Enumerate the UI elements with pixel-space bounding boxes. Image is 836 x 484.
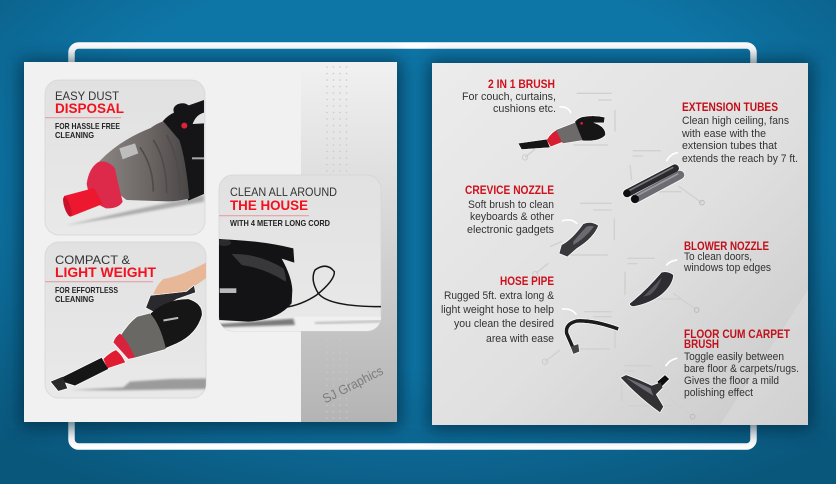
item: 2 in 1 brush: cushions etc. <box>493 103 556 115</box>
item: extension tubes: Clean high ceiling, fans <box>682 115 789 127</box>
card: compact and light weight: LIGHT WEIGHT <box>55 265 157 280</box>
item: crevice nozzle <box>465 185 614 277</box>
item: hose pipe: you clean the desired <box>454 318 554 330</box>
item: floor cum carpet brush: Toggle easily between <box>684 351 784 363</box>
icon: hose <box>542 273 625 364</box>
item: crevice nozzle: electronic gadgets <box>467 224 554 236</box>
item: floor cum carpet brush: polishing effect <box>684 387 753 399</box>
card: easy dust disposal <box>45 80 205 235</box>
item: floor cum carpet brush <box>621 329 799 419</box>
item: extension tubes: extension tubes that <box>682 140 777 152</box>
subtext: WITH 4 METER LONG CORD <box>230 218 330 228</box>
panel shadows <box>20 60 813 430</box>
item: hose pipe: area with ease <box>486 333 554 345</box>
subtext <box>55 285 118 304</box>
vacuum with power cord <box>218 239 381 331</box>
item: crevice nozzle: CREVICE NOZZLE <box>465 185 554 197</box>
heading: EASY DUST <box>55 89 120 103</box>
panel: accessories <box>432 63 808 425</box>
card: clean all around the house: THE HOUSE <box>230 198 308 213</box>
subtext: CLEANING <box>55 130 94 140</box>
subtext: FOR EFFORTLESS <box>55 285 118 295</box>
vacuum with red dust cup <box>61 100 204 226</box>
item: hose pipe: HOSE PIPE <box>500 276 554 288</box>
item: blower nozzle: windows top edges <box>683 262 771 274</box>
item: extension tubes <box>623 102 798 205</box>
card: easy dust disposal: DISPOSAL <box>55 101 124 116</box>
item: hose pipe: Rugged 5ft. extra long & <box>444 290 555 302</box>
item: 2 in 1 brush <box>462 79 615 160</box>
item: crevice nozzle: keyboards & other <box>470 211 554 223</box>
icon: crevice nozzle <box>533 203 614 277</box>
icon: floor brush <box>621 358 695 419</box>
hand holding vacuum <box>51 262 207 391</box>
card: clean all around the house <box>218 175 381 331</box>
subtext: CLEANING <box>55 294 94 304</box>
subtext: FOR HASSLE FREE <box>55 121 120 131</box>
item: hose pipe <box>441 273 625 364</box>
heading: COMPACT & <box>55 253 130 267</box>
watermark: SJ Graphics <box>320 363 386 406</box>
heading: CLEAN ALL AROUND <box>230 185 337 199</box>
item: crevice nozzle: Soft brush to clean <box>468 199 554 211</box>
icon: tubes <box>623 151 704 205</box>
subtext <box>55 121 120 140</box>
item: extension tubes: with ease with the <box>681 128 766 140</box>
item: blower nozzle: To clean doors, <box>684 251 752 263</box>
item: floor cum carpet brush: Gives the floor a mild <box>684 375 779 387</box>
item: blower nozzle <box>625 241 771 312</box>
item: blower nozzle: BLOWER NOZZLE <box>684 241 769 253</box>
item: 2 in 1 brush: For couch, curtains, <box>462 91 556 103</box>
white frame <box>72 46 754 446</box>
item: extension tubes: extends the reach by 7 ft. <box>682 153 798 165</box>
panel: left features <box>24 62 397 422</box>
card: compact and light weight <box>45 242 207 398</box>
decorative strip <box>301 62 397 422</box>
item: 2 in 1 brush: 2 IN 1 BRUSH <box>488 79 555 91</box>
item: floor cum carpet brush: BRUSH <box>684 339 719 351</box>
item: hose pipe: light weight hose to help <box>441 304 554 316</box>
icon: blower nozzle <box>625 258 699 312</box>
item: extension tubes: EXTENSION TUBES <box>682 102 778 114</box>
item: floor cum carpet brush: FLOOR CUM CARPET <box>684 329 790 341</box>
item: floor cum carpet brush: bare floor & carpets/rugs. <box>684 363 799 375</box>
icon: vacuum with brush <box>518 93 615 160</box>
